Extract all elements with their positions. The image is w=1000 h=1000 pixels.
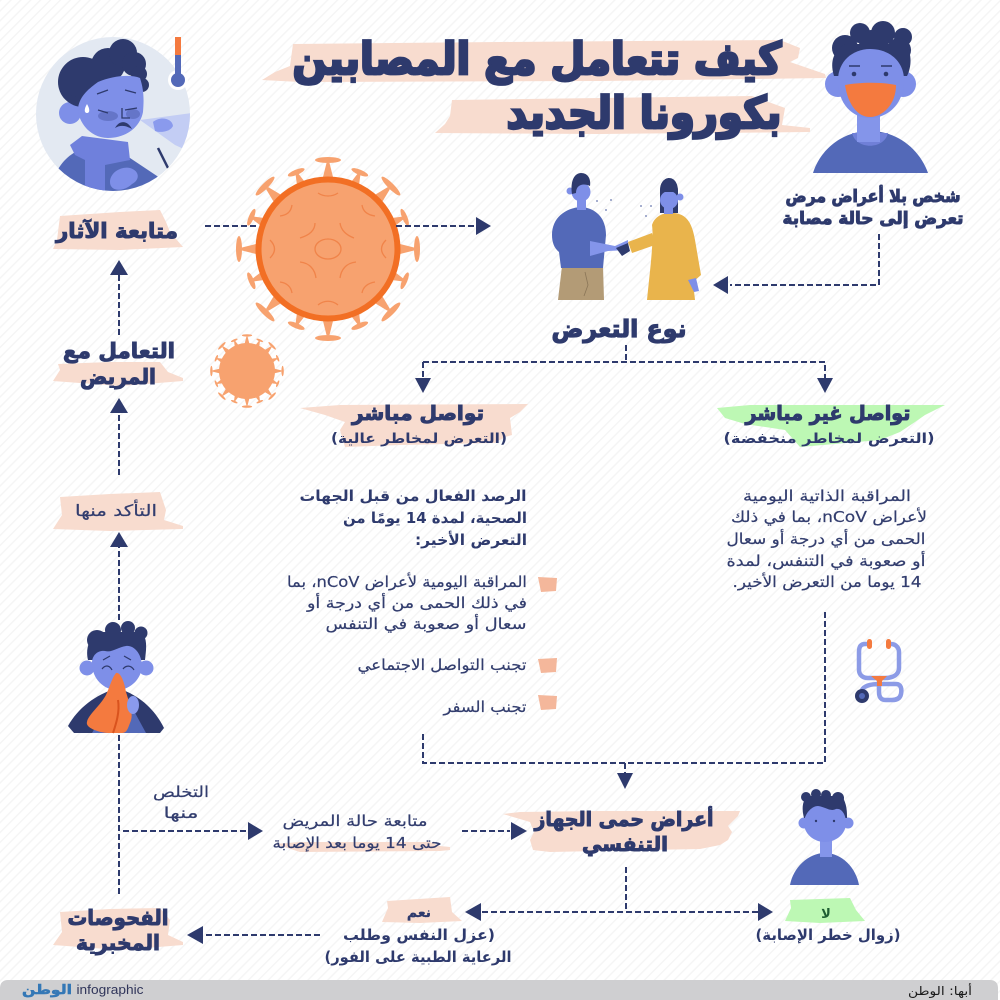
text: asymptomatic person: تعرض إلى حالة مصابة <box>782 209 964 229</box>
label: monitor symptoms <box>53 210 183 250</box>
label: yes, self isolate: نعم <box>407 905 431 921</box>
heading: direct contact: تواصل مباشر <box>351 401 484 425</box>
bullet: avoid travel <box>442 695 557 716</box>
text: asymptomatic person: شخص بلا أعراض مرض <box>786 185 960 207</box>
arrow: down to lab tests line <box>118 735 120 897</box>
label: respiratory fever symptoms <box>503 805 740 857</box>
label: monitor symptoms: متابعة الآثار <box>55 219 178 243</box>
title: بكورونا الجديد <box>506 88 782 139</box>
text: daily self monitoring: أو صعوبة في التنفس، لمدة <box>726 551 926 571</box>
icon: small virus <box>210 334 284 408</box>
icon: large virus <box>236 157 420 341</box>
label: yes, self isolate: الرعاية الطبية على الفور) <box>324 948 512 966</box>
arrow: up to confirm <box>110 532 128 620</box>
arrow: to lab tests <box>187 926 320 944</box>
label: follow up patient 14 days <box>272 812 450 852</box>
text: daily self monitoring: المراقبة الذاتية اليومية <box>743 487 911 505</box>
label: lab tests: الفحوصات <box>68 906 168 930</box>
arrow: up to monitor symptoms <box>110 260 128 335</box>
text: daily self monitoring: لأعراض nCoV، بما في ذلك <box>731 507 927 527</box>
bullet: avoid social contact: تجنب التواصل الاجتماعي <box>358 656 526 675</box>
heading: direct contact: (التعرض لمخاطر عالية) <box>331 431 507 447</box>
label: follow up patient 14 days: متابعة حالة المريض <box>282 812 428 830</box>
text: active monitoring by health authorities: التعرض الأخير: <box>415 531 527 549</box>
label: no, risk cleared: لا <box>821 907 831 922</box>
logo: الوطن <box>22 983 72 998</box>
bullet: daily monitoring <box>287 572 557 634</box>
text: daily self monitoring: الحمى من أي درجة أو سعال <box>726 529 926 549</box>
text: get rid of it: التخلص <box>153 783 209 801</box>
icon: two people shaking hands <box>552 173 701 300</box>
label: lab tests <box>53 906 183 955</box>
label: yes, self isolate <box>324 897 512 966</box>
text: active monitoring by health authorities: الرصد الفعال من قبل الجهات <box>300 487 526 505</box>
arrow: monitoring through virus to exposure <box>205 217 491 235</box>
label: dealing with the patient <box>53 339 183 389</box>
heading: indirect contact <box>717 401 945 447</box>
icon: person blowing nose <box>68 621 164 733</box>
arrow: to respiratory symptoms <box>462 822 527 840</box>
credit: أبها: الوطن <box>908 983 972 999</box>
text: asymptomatic person <box>782 185 964 229</box>
heading: indirect contact: تواصل غير مباشر <box>745 401 910 425</box>
text: active monitoring by health authorities: الصحية، لمدة 14 يومًا من <box>343 509 527 527</box>
heading: direct contact <box>300 401 528 447</box>
label: lab tests: المخبرية <box>76 931 160 955</box>
text: daily self monitoring <box>726 487 927 591</box>
label: yes, self isolate: (عزل النفس وطلب <box>343 926 495 944</box>
title <box>262 34 826 139</box>
text: get rid of it <box>153 783 209 822</box>
label: infographic: infographic <box>76 983 144 997</box>
bullet: avoid travel: تجنب السفر <box>442 698 526 716</box>
arrow: exposure type split <box>415 345 833 393</box>
title: كيف تتعامل مع المصابين <box>292 34 782 85</box>
label: confirm it <box>53 492 183 531</box>
label: dealing with the patient: التعامل مع <box>63 339 175 363</box>
icon: healthy person <box>790 789 859 885</box>
arrow: symptoms convergence <box>423 612 825 789</box>
icon: coughing patient in circle with thermometer <box>36 37 192 195</box>
bullet: daily monitoring: المراقبة اليومية لأعراض nCoV، بما <box>287 572 527 591</box>
bullet: daily monitoring: في ذلك الحمى من أي درجة أو <box>306 593 527 613</box>
icon: masked person <box>813 21 928 173</box>
label: respiratory fever symptoms: التنفسي <box>582 832 668 857</box>
footer bar <box>0 980 998 1000</box>
arrow: yes / no branch <box>465 867 773 921</box>
text: get rid of it: منها <box>164 804 198 822</box>
label: confirm it: التأكد منها <box>75 499 157 521</box>
icon: stethoscope <box>855 639 901 703</box>
arrow: person to exposure <box>713 234 879 294</box>
text: daily self monitoring: 14 يوما من التعرض الأخير. <box>732 572 922 591</box>
label: no, risk cleared: (زوال خطر الإصابة) <box>756 926 900 944</box>
label: dealing with the patient: المريض <box>80 365 156 389</box>
bullet: daily monitoring: سعال أو صعوبة في التنفس <box>326 614 526 634</box>
text: active monitoring by health authorities <box>300 487 527 549</box>
arrow: dispose branch <box>123 822 263 840</box>
heading: exposure type: نوع التعرض <box>552 315 686 343</box>
arrow: up to dealing with patient <box>110 398 128 475</box>
label: no, risk cleared <box>756 898 900 944</box>
heading: indirect contact: (التعرض لمخاطر منخفضة) <box>724 431 934 447</box>
label: follow up patient 14 days: حتى 14 يوما بعد الإصابة <box>272 834 442 852</box>
label: respiratory fever symptoms: أعراض حمى الجهاز <box>534 805 714 831</box>
